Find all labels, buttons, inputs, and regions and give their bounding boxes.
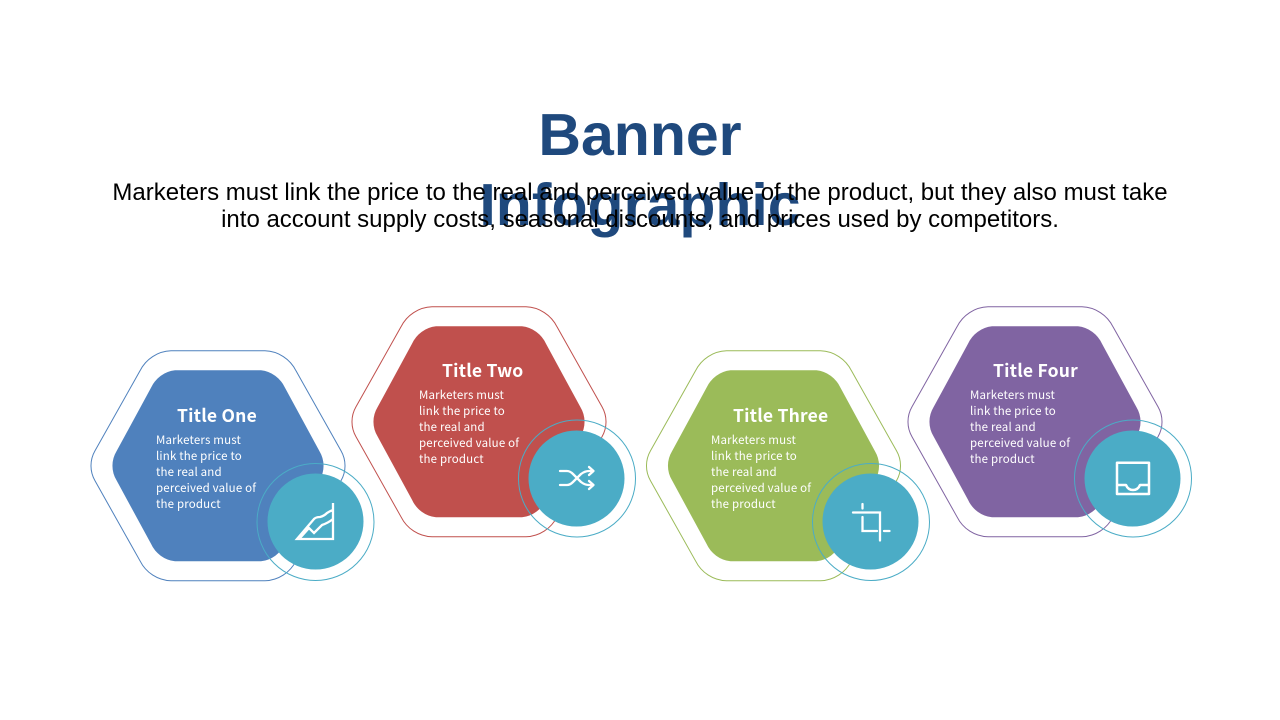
text: body one: perceived value of <box>156 480 256 496</box>
heading: title three: Title Three <box>733 403 828 428</box>
text: body two: perceived value of <box>419 435 519 451</box>
text: body three: Marketers must <box>711 432 796 448</box>
text: body two: the real and <box>419 419 485 435</box>
panel: purple hexagon <box>908 307 1162 537</box>
text: body four <box>970 387 1070 467</box>
text: body three <box>711 432 812 512</box>
subtitle text <box>112 179 1168 233</box>
icon: crop badge <box>812 464 930 580</box>
icon: shuffle badge <box>518 420 636 537</box>
subtitle text: into account supply costs, seasonal discounts, and prices used by competitors. <box>221 206 1059 233</box>
text: body two: the product <box>419 451 484 467</box>
panel: blue hexagon <box>91 351 345 581</box>
text: body one: Marketers must <box>156 432 241 448</box>
panel: green hexagon <box>646 351 901 581</box>
heading: title one: Title One <box>177 403 257 428</box>
heading: title two: Title Two <box>442 358 523 383</box>
text: body three: perceived value of <box>711 480 811 496</box>
text: body two: Marketers must <box>419 387 504 403</box>
title: Banner Infographic <box>479 102 801 238</box>
panel: red hexagon <box>352 307 606 537</box>
text: body two <box>419 387 520 467</box>
text: body two: link the price to <box>419 403 505 419</box>
icon: area chart badge <box>257 464 374 580</box>
text: body three: the real and <box>711 464 777 480</box>
text: body one: the product <box>156 496 221 512</box>
text: body one: link the price to <box>156 448 242 464</box>
text: body four: the product <box>970 451 1035 467</box>
text: body four: link the price to <box>970 403 1056 419</box>
icon: inbox badge <box>1074 420 1192 537</box>
text: body four: Marketers must <box>970 387 1055 403</box>
text: body four: the real and <box>970 419 1036 435</box>
heading: title four: Title Four <box>993 358 1078 383</box>
text: body three: link the price to <box>711 448 797 464</box>
text: body four: perceived value of <box>970 435 1070 451</box>
text: body one: the real and <box>156 464 222 480</box>
subtitle text: Marketers must link the price to the real and perceived value of the product, but they also must take <box>112 179 1168 206</box>
text: body three: the product <box>711 496 776 512</box>
text: body one <box>156 432 256 512</box>
